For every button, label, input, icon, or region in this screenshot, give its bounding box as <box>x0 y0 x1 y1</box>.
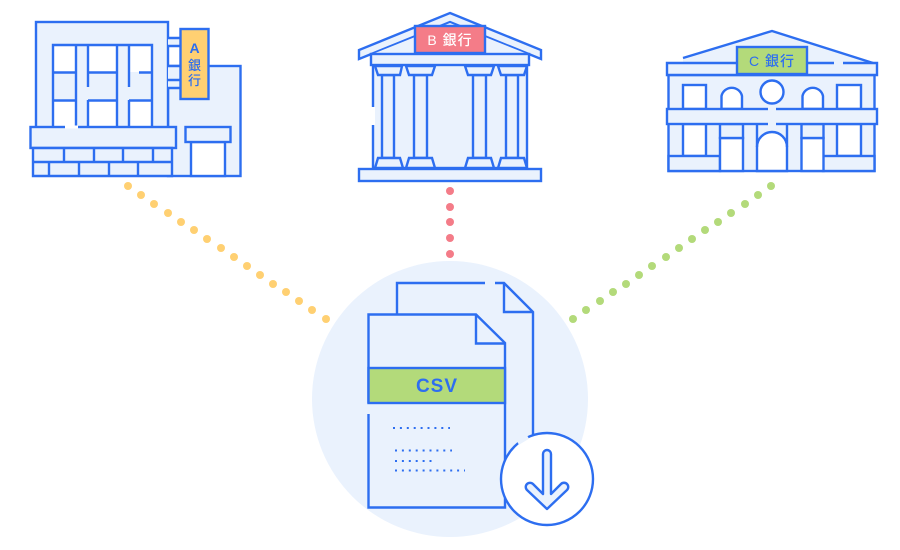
brick base <box>33 148 172 176</box>
building: B bank <box>359 13 541 181</box>
green sign: C 銀行 <box>749 53 795 69</box>
sign connectors <box>168 38 181 88</box>
dotted line: yellow <box>124 182 330 323</box>
back document <box>397 283 533 440</box>
door awning <box>186 127 230 142</box>
arrow <box>526 450 568 509</box>
yellow sign: 行 <box>188 73 201 88</box>
columns <box>375 66 527 168</box>
building: C bank <box>667 31 877 171</box>
band <box>667 109 877 124</box>
upper windows <box>683 80 861 109</box>
CSV band: CSV <box>416 376 458 397</box>
entablature <box>371 54 529 65</box>
cornice <box>667 63 877 75</box>
lower storey <box>668 124 874 171</box>
dotted line: green <box>569 182 775 323</box>
download icon <box>501 433 593 525</box>
roof <box>683 31 873 64</box>
roof <box>359 13 541 59</box>
dotted text lines <box>393 428 465 470</box>
front document <box>368 314 505 508</box>
canopy band <box>30 127 176 148</box>
yellow sign <box>180 29 208 99</box>
red sign: B 銀行 <box>427 32 473 48</box>
yellow sign: 銀 <box>188 58 201 73</box>
green sign <box>737 47 807 74</box>
CSV band <box>368 368 505 403</box>
door <box>191 142 225 176</box>
building: A bank <box>30 22 240 176</box>
body <box>668 75 874 171</box>
windows <box>53 45 152 128</box>
dotted line: pink <box>446 187 454 258</box>
base <box>359 169 541 181</box>
background circle <box>312 261 588 537</box>
red sign <box>415 26 485 53</box>
yellow sign: A <box>189 40 200 56</box>
body <box>373 60 527 168</box>
